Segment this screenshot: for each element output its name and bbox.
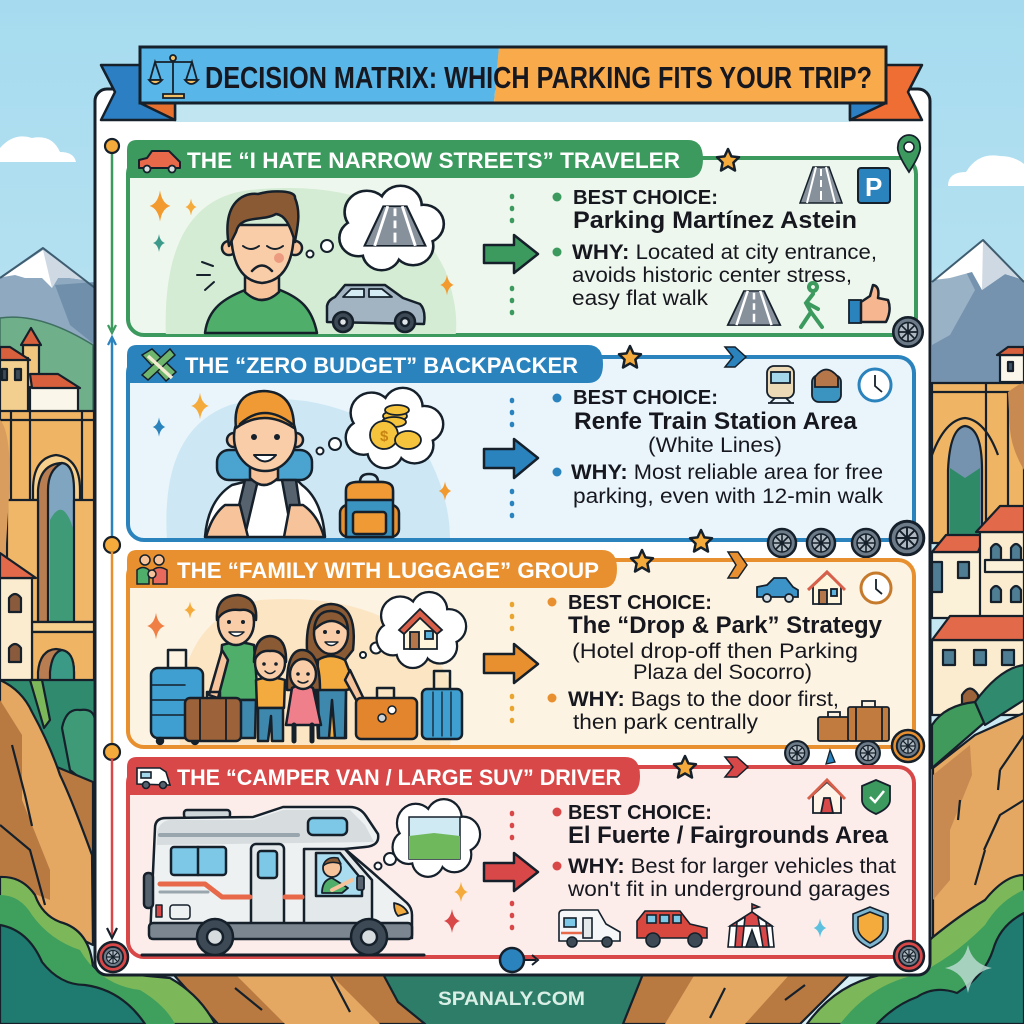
text block: best choice: BEST CHOICE: [573, 187, 718, 209]
blue route node [500, 948, 538, 972]
town right [932, 347, 1024, 715]
blue suitcase left [151, 650, 203, 744]
boy [254, 636, 286, 741]
text block: best choice: WHY: Most reliable area for free [571, 461, 883, 484]
ground center [173, 974, 850, 1024]
header text: THE “ZERO BUDGET” BACKPACKER [185, 353, 578, 378]
route line left red [107, 758, 117, 938]
backpacker [205, 391, 325, 537]
text block: best choice: parking, even with 12-min walk [573, 485, 884, 508]
town left [0, 328, 94, 703]
icon: small camper header [137, 768, 170, 788]
text block: best choice: The “Drop & Park” Strategy [568, 612, 883, 639]
text block: best choice [548, 592, 883, 734]
thought bubble road [306, 187, 442, 269]
mountain left [0, 248, 95, 420]
left bushes foreground [0, 877, 215, 1024]
star and chevron [674, 756, 748, 778]
ribbon tail left [101, 65, 175, 120]
header tab [127, 550, 617, 588]
thought bubble house [360, 593, 465, 667]
houses right [932, 552, 982, 618]
mother [307, 604, 370, 738]
cloud left [0, 136, 76, 162]
watermark sparkle [945, 945, 992, 993]
thought bubble coins [316, 389, 442, 467]
header tab [127, 140, 703, 178]
map pin [898, 135, 920, 172]
bridge left [0, 411, 94, 623]
father [209, 595, 258, 738]
icons: camper suv tent shield [559, 904, 888, 948]
divider dots and arrow [484, 196, 538, 314]
text block: best choice: BEST CHOICE: [573, 387, 718, 409]
title banner [101, 47, 922, 122]
text block: best choice [552, 802, 896, 901]
girl [286, 650, 321, 741]
sad traveler [197, 191, 317, 333]
panel: camper van / large suv driver [98, 756, 924, 972]
right bushes foreground [807, 875, 1024, 1024]
icons: house shield [808, 780, 890, 814]
header text: THE “CAMPER VAN / LARGE SUV” DRIVER [177, 765, 621, 790]
right red wheel [894, 941, 924, 971]
thought bubble coins: $ [380, 428, 389, 445]
icons: train backpack clock [767, 366, 891, 403]
orange and blue suitcases right [356, 671, 462, 739]
route line left orange [104, 552, 120, 760]
icons: car house clock [757, 572, 891, 604]
route line left green [105, 139, 119, 333]
blob [166, 188, 456, 340]
sparkles [444, 882, 826, 938]
text block: best choice: won't fit in underground garages [567, 878, 890, 901]
blob [166, 399, 450, 540]
sparkles [153, 393, 451, 501]
text block: best choice: then park centrally [573, 711, 759, 734]
icon: family [137, 555, 167, 584]
header tab [127, 345, 603, 383]
camper van [142, 807, 424, 955]
backpack [340, 474, 399, 537]
family group [209, 595, 370, 741]
star [717, 149, 739, 170]
icon: bags [818, 701, 889, 741]
panel: family with luggage [104, 550, 924, 765]
thought bubble landscape [374, 800, 479, 876]
white main card [95, 89, 930, 975]
divider dots and arrow [484, 400, 538, 518]
title text: DECISION MATRIX: WHICH PARKING FITS YOUR TRIP? [205, 60, 872, 95]
text block: best choice [552, 387, 884, 508]
mountain right [932, 240, 1024, 400]
left red wheel [98, 942, 128, 972]
right cliff [932, 665, 1024, 945]
icon: money wrench [142, 349, 176, 381]
text block: best choice: Plaza del Socorro) [633, 661, 812, 684]
header text: THE “I HATE NARROW STREETS” TRAVELER [187, 148, 680, 173]
left cliff [0, 680, 93, 945]
divider dots and arrow [484, 813, 538, 930]
text block: best choice: (White Lines) [648, 434, 782, 457]
text block: best choice: BEST CHOICE: [568, 592, 712, 614]
panel: zero budget backpacker [104, 337, 924, 557]
star and chevron [619, 346, 746, 368]
wheels row [785, 730, 924, 765]
text block: best choice: Renfe Train Station Area [574, 408, 858, 435]
icon: scales [149, 55, 198, 98]
panel: narrow streets traveler [105, 135, 923, 347]
left bushes behind the cliff [0, 680, 95, 900]
text block: best choice: WHY: Located at city entrance, [572, 241, 877, 264]
text block: best choice: (Hotel drop-off then Parking [572, 640, 858, 663]
header text: THE “FAMILY WITH LUGGAGE” GROUP [177, 558, 599, 583]
sparkles [147, 602, 196, 639]
text block: best choice: WHY: Bags to the door first, [568, 688, 839, 711]
wheels row [690, 521, 924, 557]
text block: best choice: easy flat walk [572, 287, 709, 310]
brown suitcase [185, 692, 241, 741]
star and chevron [631, 550, 747, 578]
cloud right [948, 155, 1024, 186]
text block: best choice: avoids historic center stress, [572, 264, 852, 287]
footer brand: SPANALY.COM [438, 989, 585, 1010]
blob [179, 599, 452, 745]
text block: best choice: BEST CHOICE: [568, 802, 712, 824]
sparkles [150, 190, 454, 295]
text block: best choice: Parking Martínez Astein [573, 207, 857, 234]
icons: road walker thumb [728, 283, 890, 327]
icon: red car [139, 151, 180, 172]
grey car [327, 285, 424, 332]
text block: best choice [552, 187, 877, 310]
ribbon tail right [850, 65, 922, 120]
text block: best choice: WHY: Best for larger vehicles that [568, 855, 896, 878]
wheel [893, 317, 923, 347]
icons: road and parking [800, 167, 890, 203]
text block: best choice: El Fuerte / Fairgrounds Area [568, 822, 889, 849]
icons: road and parking: P [865, 172, 882, 202]
divider dots and arrow [484, 604, 538, 724]
route line left blue [104, 337, 120, 553]
left tower [23, 345, 39, 405]
header tab [127, 757, 640, 795]
